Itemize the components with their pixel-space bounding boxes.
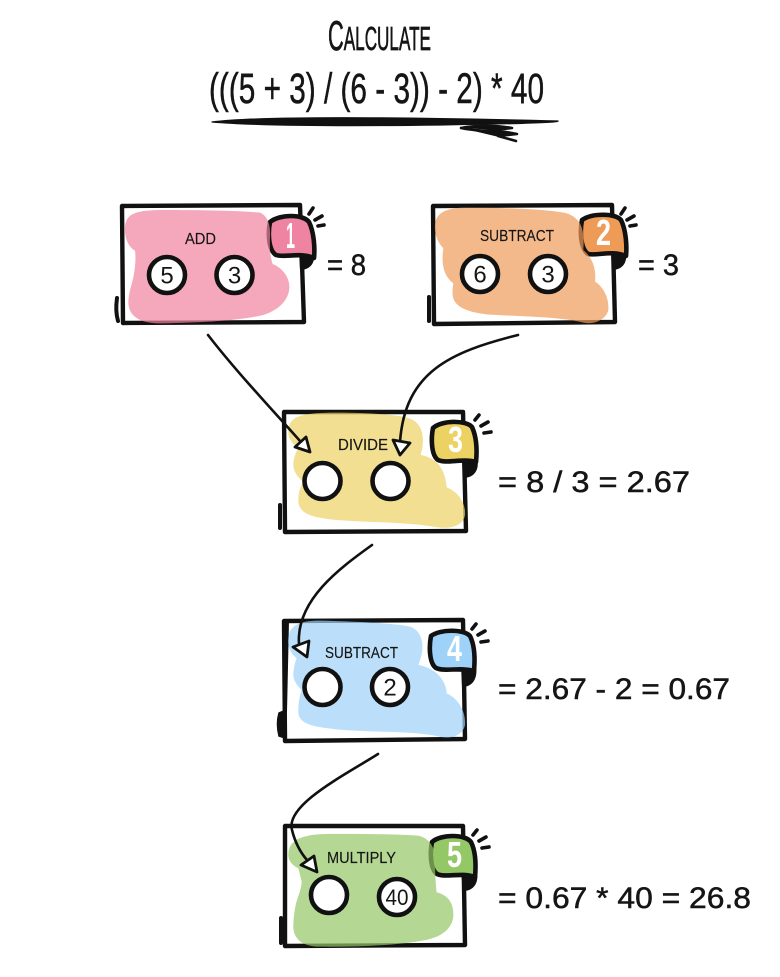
badge digit: 4 xyxy=(447,628,462,669)
input 40: 40 xyxy=(386,885,408,910)
frame xyxy=(122,205,304,323)
step badge 4 xyxy=(430,624,488,687)
card 1: add xyxy=(116,205,366,323)
frame xyxy=(284,620,465,741)
frame left edge xyxy=(285,621,287,712)
frame xyxy=(285,826,465,946)
input 5 xyxy=(149,257,185,293)
input 3: 3 xyxy=(228,262,241,290)
card 5: multiply xyxy=(281,826,751,947)
result: = 8 xyxy=(327,249,366,282)
title xyxy=(209,12,544,113)
result: = 2.67 - 2 = 0.67 xyxy=(498,673,730,706)
input 2 xyxy=(372,669,408,705)
result: = 3 xyxy=(638,249,679,282)
card label: DIVIDE xyxy=(338,437,388,454)
step badge 2 xyxy=(581,208,636,270)
color blob xyxy=(288,834,453,947)
card label: SUBTRACT xyxy=(480,228,554,245)
frame mark xyxy=(278,711,285,738)
input 3: 3 xyxy=(541,262,555,288)
input empty right xyxy=(372,463,408,499)
input 2: 2 xyxy=(383,674,397,702)
step badge 5 xyxy=(431,830,489,891)
input 6: 6 xyxy=(473,262,487,288)
title: CALCULATE xyxy=(328,12,431,59)
frame mark xyxy=(279,918,283,943)
card label: ADD xyxy=(185,231,216,248)
frame xyxy=(284,412,466,532)
card 4: subtract xyxy=(278,620,730,741)
color blob xyxy=(288,413,465,528)
card label: SUBTRACT xyxy=(325,645,398,662)
input 3 xyxy=(530,256,566,292)
input empty left xyxy=(304,463,340,499)
badge digit: 2 xyxy=(596,212,611,253)
card label: MULTIPLY xyxy=(327,850,396,867)
card 3: divide xyxy=(280,412,690,532)
arrow: add to divide xyxy=(208,335,310,452)
result: = 8 / 3 = 2.67 xyxy=(498,466,690,499)
step badge 3 xyxy=(432,415,491,478)
result: = 0.67 * 40 = 26.8 xyxy=(498,882,751,915)
badge digit: 5 xyxy=(447,834,462,875)
arrow: divide to subtract xyxy=(293,545,372,657)
frame mark xyxy=(427,297,431,321)
input 40 xyxy=(379,879,415,915)
input empty xyxy=(311,877,347,913)
color blob xyxy=(435,208,608,323)
step badge 1 xyxy=(269,208,324,270)
color blob xyxy=(288,621,465,738)
arrow: subtract to divide xyxy=(393,335,518,455)
arrow: subtract to multiply xyxy=(291,754,378,872)
title: (((5 + 3) / (6 - 3)) - 2) * 40 xyxy=(209,65,544,113)
title underline scribble xyxy=(212,118,558,141)
input 3 xyxy=(216,257,252,293)
card 1: add: 1 xyxy=(286,215,295,256)
input empty xyxy=(304,669,340,705)
card 2: subtract xyxy=(429,205,679,324)
badge digit: 3 xyxy=(448,419,463,460)
frame xyxy=(433,205,615,324)
input 5: 5 xyxy=(160,262,174,290)
input 6 xyxy=(462,256,498,292)
frame mark xyxy=(278,505,282,528)
color blob xyxy=(125,210,289,323)
frame mark xyxy=(116,298,118,321)
